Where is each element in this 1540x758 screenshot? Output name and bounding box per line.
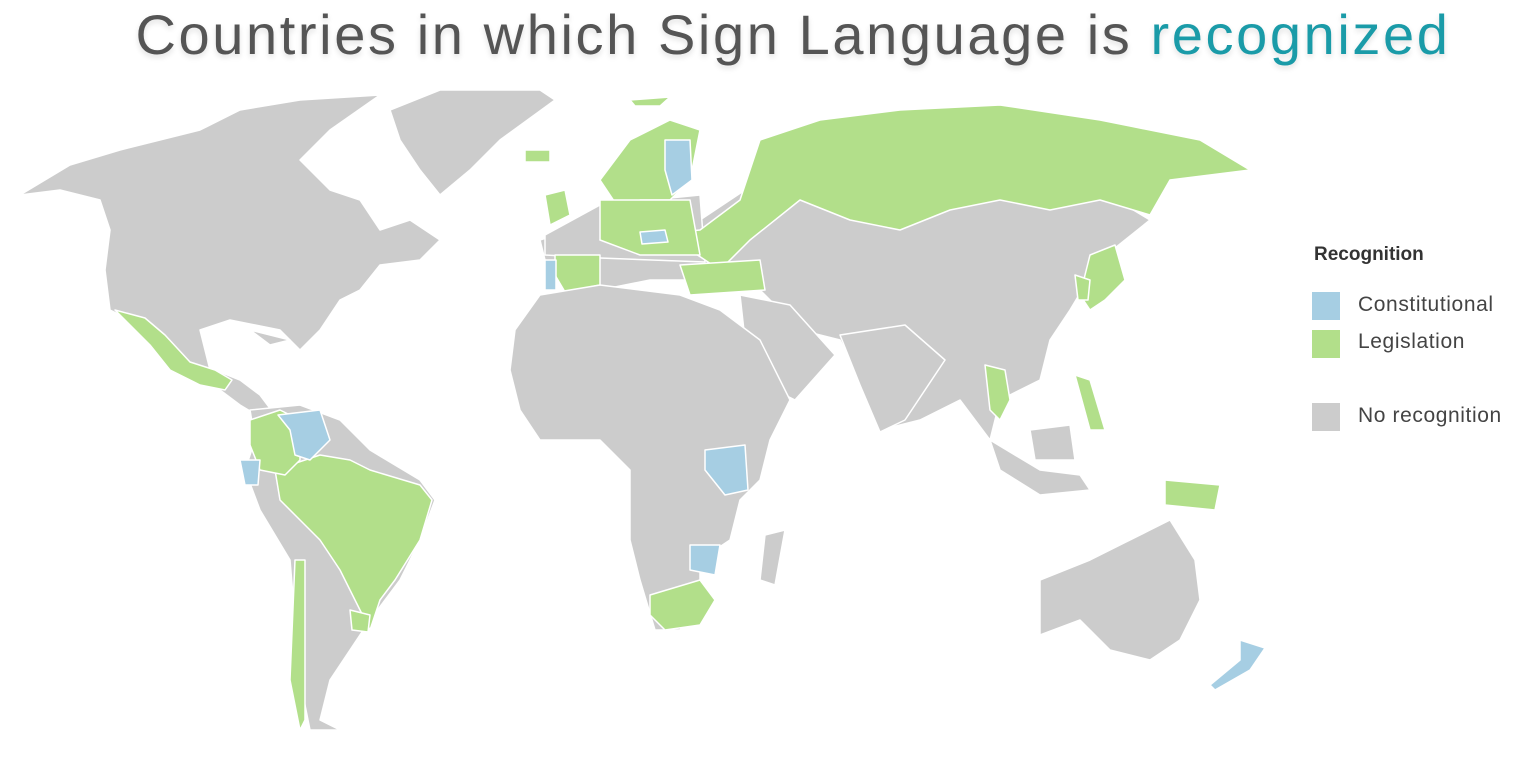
north america bbox=[20, 90, 555, 420]
legend: legislation bbox=[1312, 330, 1340, 358]
mexico bbox=[115, 310, 232, 390]
legend: Legislation bbox=[1358, 330, 1465, 353]
legend: none bbox=[1312, 403, 1340, 431]
title: Countries in which Sign Language is recognized bbox=[135, 3, 1451, 66]
legend: Recognition bbox=[1314, 244, 1424, 265]
eurasia bbox=[525, 97, 1250, 510]
legend bbox=[1312, 244, 1502, 431]
south america bbox=[240, 405, 435, 730]
legend: constitutional bbox=[1312, 292, 1340, 320]
africa bbox=[510, 285, 790, 630]
oceania bbox=[1040, 520, 1265, 690]
legend: No recognition bbox=[1358, 404, 1502, 427]
legend: Constitutional bbox=[1358, 293, 1494, 316]
